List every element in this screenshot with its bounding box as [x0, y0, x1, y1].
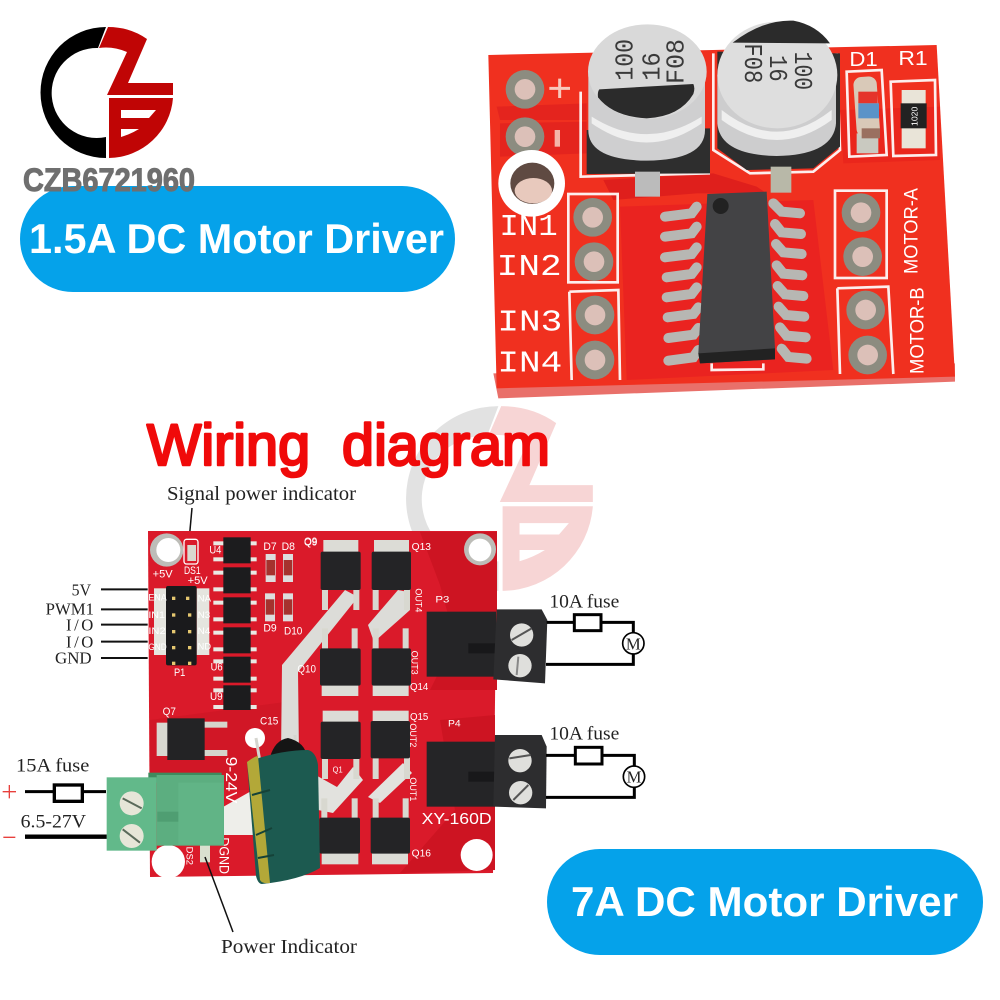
board labels: Q1 [333, 765, 343, 775]
pads [506, 70, 887, 379]
blue label: 1.5A DC Motor Driver: 1.5A DC Motor Driver [29, 215, 444, 262]
board labels: XY-160D [422, 811, 492, 828]
silkscreen labels: N3 [198, 610, 210, 620]
photo: 7A motor driver board [148, 531, 497, 884]
optocoupler chips [213, 541, 257, 709]
signal input wires and labels [46, 580, 148, 667]
board labels: OUT1 [408, 777, 418, 801]
board labels: IN2 [497, 250, 562, 285]
electrolytic capacitor [245, 728, 320, 884]
silkscreen labels: C15 [260, 715, 278, 727]
MOSFET row 1 [321, 540, 411, 610]
board labels: MOTOR-B [907, 287, 928, 374]
silkscreen labels: P1 [174, 667, 185, 679]
motor wiring with 10A fuse, top: 10A fuse [549, 591, 619, 612]
watermark logo [406, 406, 593, 591]
signal input wires and labels: 5V [72, 580, 91, 599]
motor wiring with 10A fuse, top [546, 591, 644, 664]
signal input wires and labels: PWM1 [46, 599, 94, 618]
board labels: IN4 [497, 347, 562, 382]
silkscreen labels: D10 [284, 626, 302, 638]
silkscreen outlines [568, 53, 936, 380]
green power terminal block [107, 773, 224, 851]
signal input wires and labels: I/O [66, 632, 93, 651]
brand logo [40, 27, 173, 158]
mounting hole [498, 150, 565, 217]
resistor R1 [901, 90, 927, 148]
silkscreen labels: +5V [188, 575, 208, 587]
pin header [154, 586, 209, 665]
silkscreen labels [148, 536, 317, 874]
board labels: P4 [448, 719, 461, 729]
silkscreen labels: NA [198, 593, 211, 603]
blue label: 7A DC Motor Driver [547, 849, 983, 955]
label: Signal power indicator: Signal power indicator [167, 483, 356, 505]
silkscreen labels: IN1 [148, 610, 165, 620]
silkscreen labels: D7 [263, 541, 277, 553]
MOSFET row 4 [319, 798, 410, 864]
capacitor right: F08 [737, 43, 767, 83]
board labels: Q13 [412, 542, 431, 553]
silkscreen labels: GND [148, 642, 167, 652]
board labels: D1 [849, 48, 878, 71]
silkscreen labels: Q10 [297, 664, 316, 676]
board labels: MOTOR-A [901, 188, 922, 274]
title: Wiring diagram: Wiring diagram [147, 413, 550, 478]
board labels: Q15 [410, 712, 429, 723]
capacitor left: 100 [611, 39, 641, 81]
power input wiring with 15A fuse: 6.5-27V [21, 811, 86, 832]
silkscreen labels: ND [198, 641, 212, 651]
diode D1 [853, 76, 880, 153]
label: Power Indicator: Power Indicator [221, 936, 357, 958]
brand code text: CZB6721960 [23, 162, 195, 198]
DS2 LED [200, 845, 210, 862]
motor wiring with 10A fuse, bottom [546, 723, 645, 797]
power input wiring with 15A fuse: 15A fuse [16, 756, 89, 777]
board labels: OUT2 [408, 723, 418, 747]
silver power traces [281, 590, 358, 755]
silkscreen labels: DS2 [185, 847, 195, 865]
motor wiring with 10A fuse, bottom: 10A fuse [549, 723, 619, 744]
signal input wires and labels: GND [55, 648, 92, 667]
silkscreen labels: 9-24V [222, 757, 239, 804]
IC chip [665, 192, 807, 363]
power input wiring with 15A fuse [3, 756, 107, 837]
signal input wires and labels: I/O [66, 616, 93, 635]
motor wiring with 10A fuse, bottom: M [627, 768, 642, 787]
board labels: IN3 [497, 306, 562, 341]
capacitor left: F08 [661, 39, 691, 84]
blue label: 1.5A DC Motor Driver [20, 186, 455, 292]
board labels [304, 537, 492, 860]
black motor terminal blocks [427, 609, 547, 808]
DS1 LED [184, 539, 198, 564]
capacitor right: 100 [787, 52, 817, 90]
capacitor left: 16 [637, 52, 667, 81]
photo: 1.5A motor driver board [488, 21, 955, 398]
silkscreen labels: Q9 [304, 536, 317, 548]
regulator Q7 [157, 718, 227, 760]
label: Signal power indicator [167, 483, 356, 541]
silkscreen labels: D8 [282, 541, 295, 553]
capacitor right: 16 [762, 55, 792, 82]
board labels: OUT3 [409, 651, 419, 675]
board labels: OUT4 [413, 588, 423, 612]
silkscreen labels: U4 [209, 544, 221, 556]
resistor R1: 1020 [909, 106, 919, 126]
silkscreen labels: U9 [210, 691, 223, 703]
MOSFET row 3 [321, 711, 410, 779]
capacitor left [587, 24, 710, 197]
silkscreen labels: N4 [198, 626, 210, 636]
MOSFET row 2 [320, 628, 411, 696]
silkscreen labels: IN2 [148, 626, 166, 636]
label: Power Indicator [205, 857, 357, 958]
board labels: IN1 [499, 210, 558, 245]
silkscreen labels: U6 [211, 662, 223, 674]
board labels: P3 [435, 594, 449, 604]
mounting holes [150, 533, 183, 567]
capacitor right [717, 21, 840, 193]
silkscreen labels: ENA [148, 593, 167, 603]
diodes [265, 554, 293, 621]
silkscreen labels: Q7 [163, 706, 176, 718]
silkscreen labels: DGND [216, 837, 232, 874]
blue label: 7A DC Motor Driver: 7A DC Motor Driver [571, 878, 958, 925]
board labels: Q14 [410, 682, 429, 693]
silkscreen labels: DS1 [184, 565, 201, 577]
board labels [497, 47, 928, 382]
silkscreen labels: +5V [153, 568, 173, 580]
motor wiring with 10A fuse, top: M [626, 634, 641, 653]
left half details [148, 533, 317, 878]
board labels: Q9 [304, 537, 318, 548]
board labels: R1 [898, 47, 928, 70]
silkscreen labels: D9 [263, 622, 277, 634]
board labels: Q16 [412, 849, 431, 860]
right half details [304, 533, 496, 871]
